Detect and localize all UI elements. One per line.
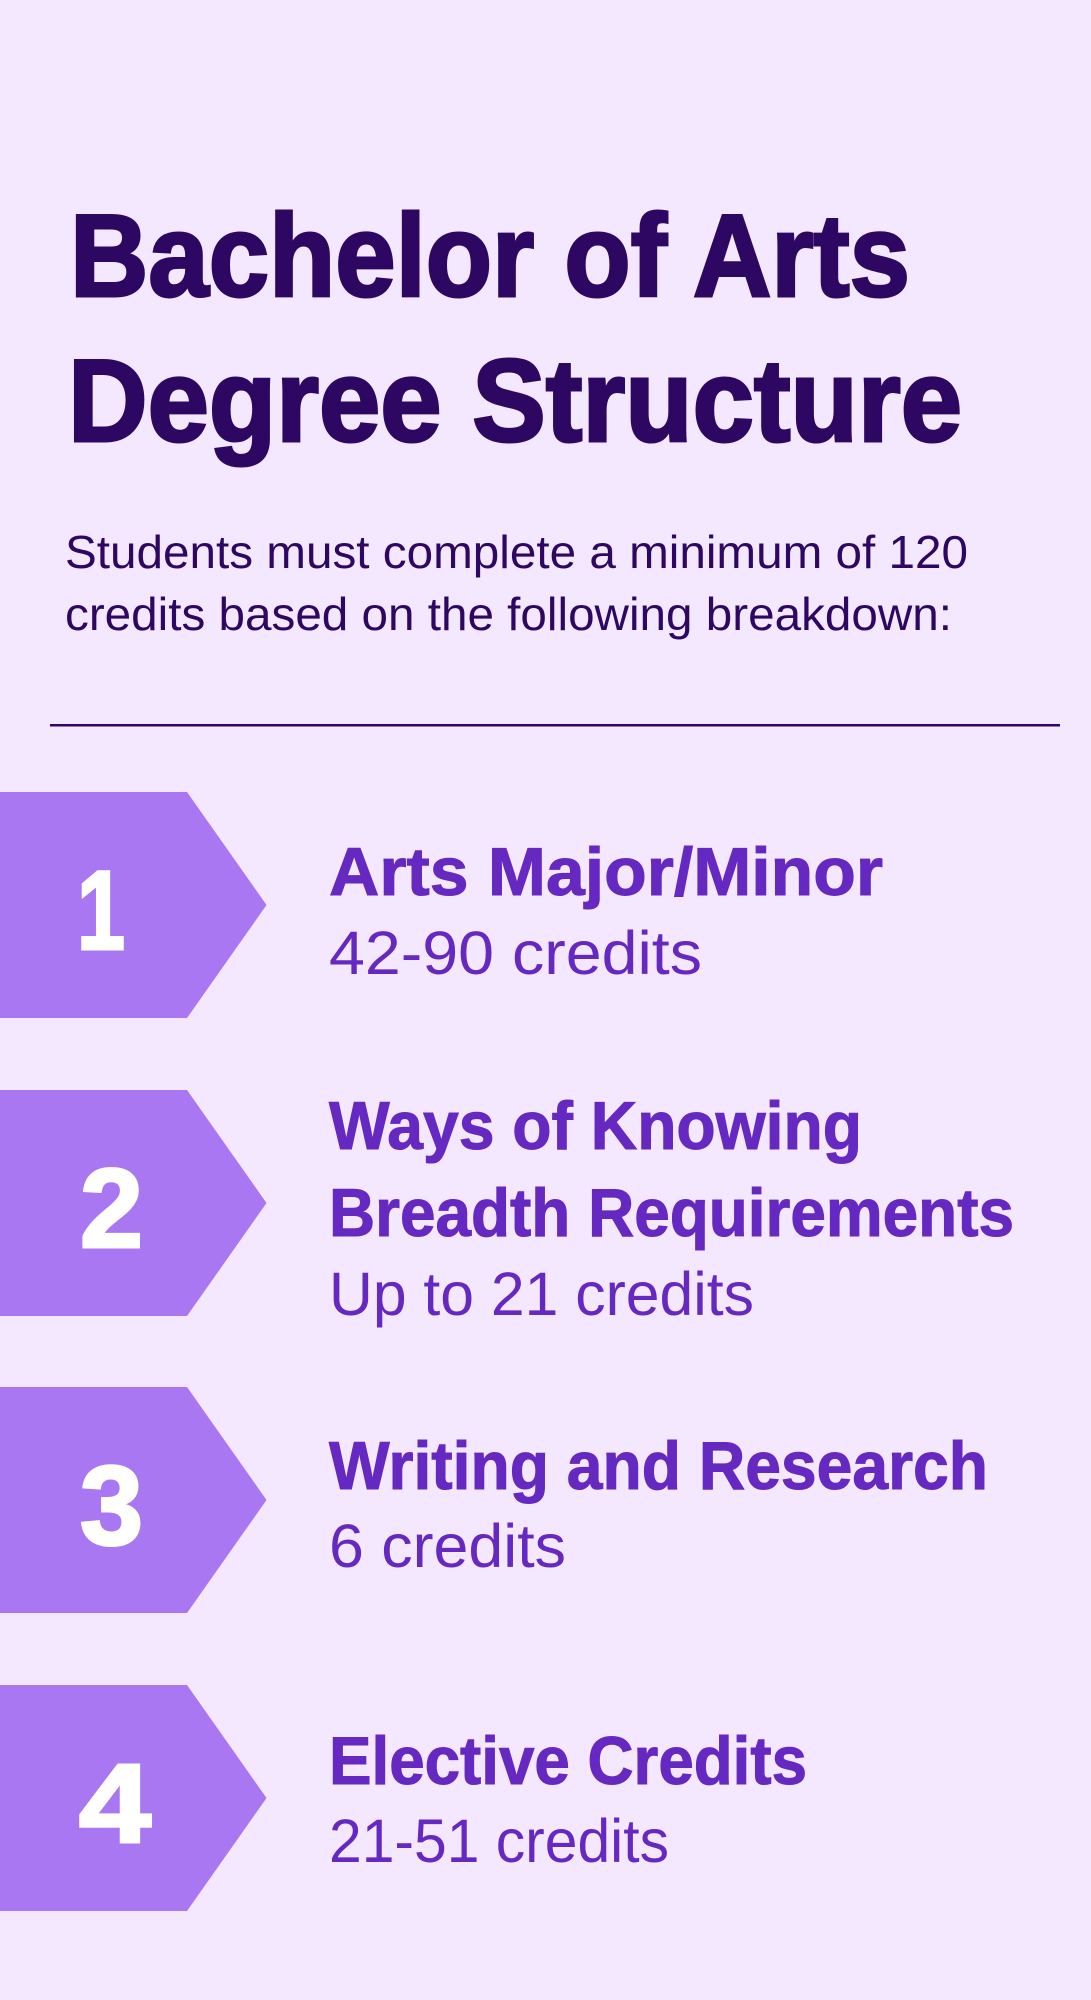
title: Degree Structure: [68, 335, 962, 466]
step 3: writing and research: [0, 1387, 988, 1613]
step 4: elective credits: [0, 1685, 807, 1911]
number 3: 3: [80, 1443, 143, 1568]
heading: ways of knowing breadth requirements: Ways of Knowing: [329, 1088, 862, 1164]
credits: 6: 6 credits: [329, 1512, 566, 1580]
number 2: 2: [80, 1146, 143, 1271]
intro text: credits based on the following breakdown:: [65, 588, 952, 640]
number 1: 1: [77, 848, 125, 973]
credits: up to 21: Up to 21 credits: [329, 1260, 754, 1328]
heading: elective credits: Elective Credits: [329, 1723, 807, 1799]
arrow badge 3: [0, 1387, 266, 1613]
arrow badge 2: [0, 1090, 266, 1316]
title: [68, 190, 962, 466]
intro text: Students must complete a minimum of 120: [65, 526, 968, 578]
credits: 21-51: 21-51 credits: [329, 1807, 669, 1875]
arrow badge 1: [0, 792, 266, 1018]
step 2: ways of knowing: [0, 1088, 1014, 1328]
credits: 42-90: 42-90 credits: [329, 919, 702, 987]
heading: writing and research: Writing and Research: [329, 1428, 988, 1504]
heading: arts major/minor: Arts Major/Minor: [329, 834, 883, 910]
number 4: 4: [79, 1741, 151, 1866]
arrow badge 4: [0, 1685, 266, 1911]
heading: ways of knowing breadth requirements: Breadth Requirements: [329, 1175, 1014, 1251]
title: Bachelor of Arts: [70, 190, 910, 321]
intro text: [65, 526, 968, 640]
step 1: arts major/minor: [0, 792, 883, 1018]
heading: ways of knowing breadth requirements: [329, 1088, 1014, 1251]
